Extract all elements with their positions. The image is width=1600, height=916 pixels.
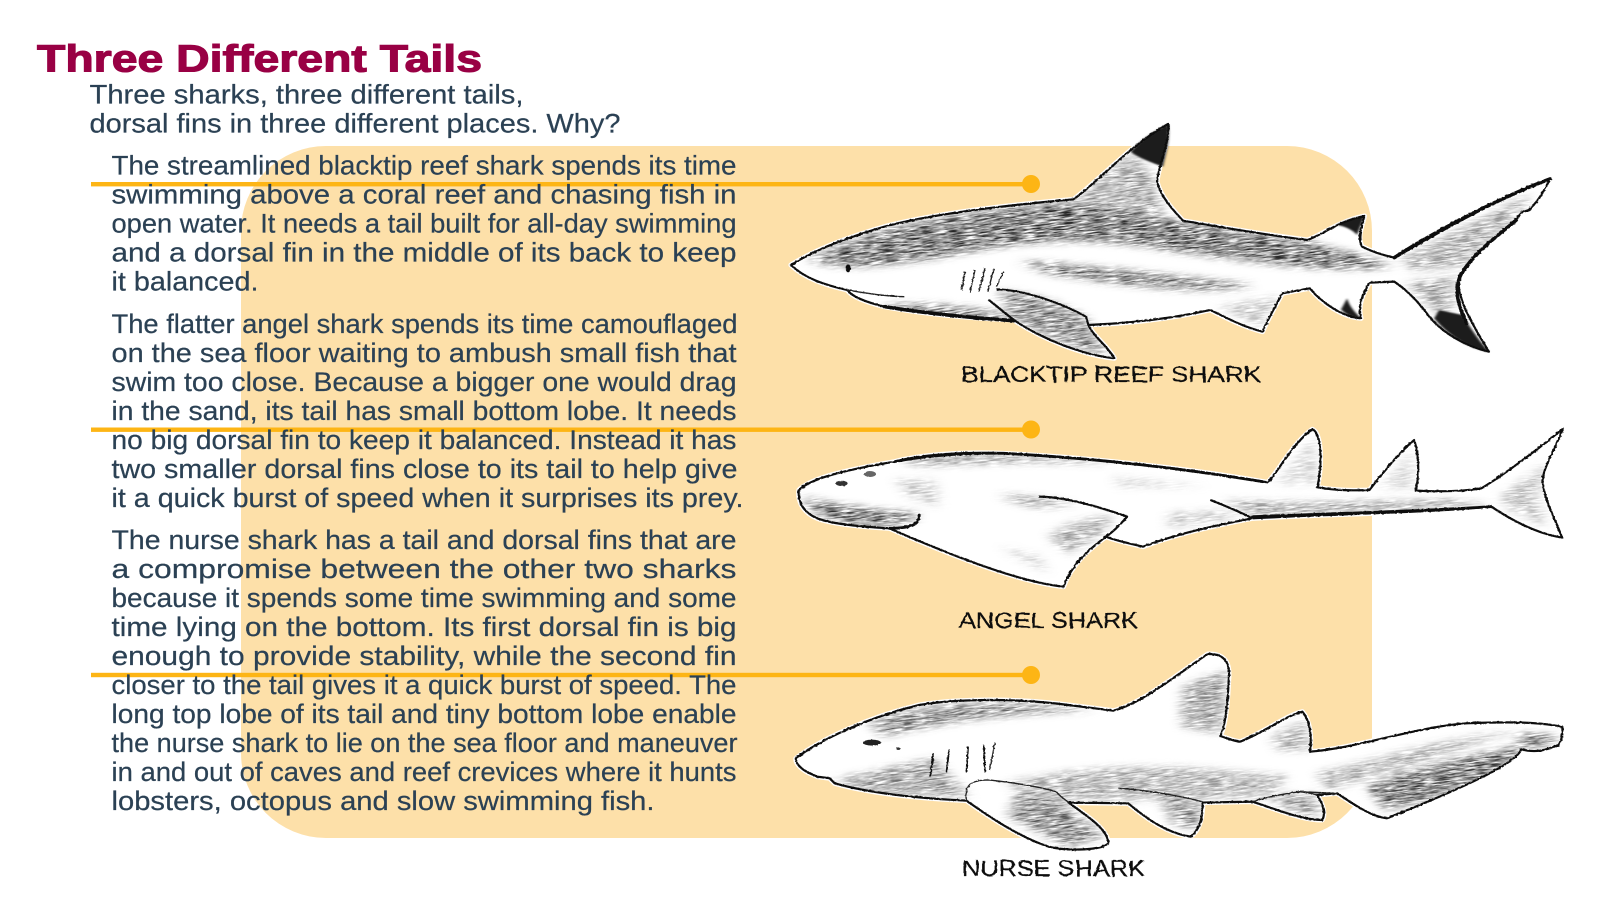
paragraph: nurse shark: the nurse shark to lie on the sea floor and maneuver <box>112 728 738 758</box>
paragraph: angel shark: no big dorsal fin to keep it balanced. Instead it has <box>112 425 736 455</box>
paragraph: blacktip reef shark: open water. It needs a tail built for all-day swimming <box>112 208 736 238</box>
pencil shading <box>804 153 1534 356</box>
background panel <box>241 146 1372 838</box>
paragraph: blacktip reef shark: and a dorsal fin in the middle of its back to keep <box>112 238 736 268</box>
black fin tips <box>1131 124 1489 352</box>
paragraph: blacktip reef shark: it balanced. <box>112 266 258 296</box>
leader line: nurse shark <box>91 666 1040 684</box>
paragraph: nurse shark: The nurse shark has a tail and dorsal fins that are <box>112 525 736 555</box>
intro text: Three sharks, three different tails, <box>90 80 524 110</box>
intro text: dorsal fins in three different places. Why? <box>90 108 620 138</box>
paragraph: blacktip reef shark: The streamlined blacktip reef shark spends its time <box>112 150 736 180</box>
paragraph: angel shark: two smaller dorsal fins close to its tail to help give <box>112 454 738 484</box>
paragraph: blacktip reef shark <box>112 150 736 296</box>
intro text <box>90 80 620 138</box>
leader line: blacktip reef shark <box>91 175 1040 193</box>
outline and details <box>791 124 1550 358</box>
shark label: blacktip reef shark: BLACKTIP REEF SHARK <box>961 362 1261 387</box>
paragraph: angel shark <box>112 309 744 513</box>
shark label: nurse shark: NURSE SHARK <box>962 856 1145 881</box>
paragraph: angel shark: The flatter angel shark spends its time camouflaged <box>112 309 738 339</box>
paragraph: nurse shark: long top lobe of its tail and tiny bottom lobe enable <box>112 699 736 729</box>
outline and details <box>796 654 1562 850</box>
paragraph: nurse shark: a compromise between the other two sharks <box>112 554 736 584</box>
shark label: angel shark: ANGEL SHARK <box>959 608 1138 633</box>
shark illustration: angel shark <box>777 368 1574 642</box>
paragraph: nurse shark <box>112 525 738 816</box>
title: Three Different Tails <box>37 38 482 80</box>
paragraph: blacktip reef shark: swimming above a coral reef and chasing fish in <box>112 180 736 210</box>
shark illustration: blacktip reef shark <box>758 71 1583 438</box>
paragraph: angel shark: on the sea floor waiting to ambush small fish that <box>112 338 737 368</box>
paragraph: nurse shark: lobsters, octopus and slow swimming fish. <box>112 786 654 816</box>
paragraph: angel shark: in the sand, its tail has small bottom lobe. It needs <box>112 396 736 426</box>
paragraph: angel shark: swim too close. Because a bigger one would drag <box>112 367 736 397</box>
pencil shading <box>800 440 1550 572</box>
shark illustration: nurse shark <box>790 587 1600 916</box>
outline and details <box>799 429 1563 587</box>
pencil shading <box>833 668 1560 848</box>
paragraph: nurse shark: because it spends some time swimming and some <box>112 583 736 613</box>
paragraph: nurse shark: closer to the tail gives it a quick burst of speed. The <box>112 670 736 700</box>
leader line: angel shark <box>91 420 1040 438</box>
paragraph: nurse shark: enough to provide stability, while the second fin <box>112 641 736 671</box>
paragraph: nurse shark: time lying on the bottom. Its first dorsal fin is big <box>112 612 736 642</box>
paragraph: nurse shark: in and out of caves and reef crevices where it hunts <box>112 757 736 787</box>
paragraph: angel shark: it a quick burst of speed when it surprises its prey. <box>112 483 744 513</box>
